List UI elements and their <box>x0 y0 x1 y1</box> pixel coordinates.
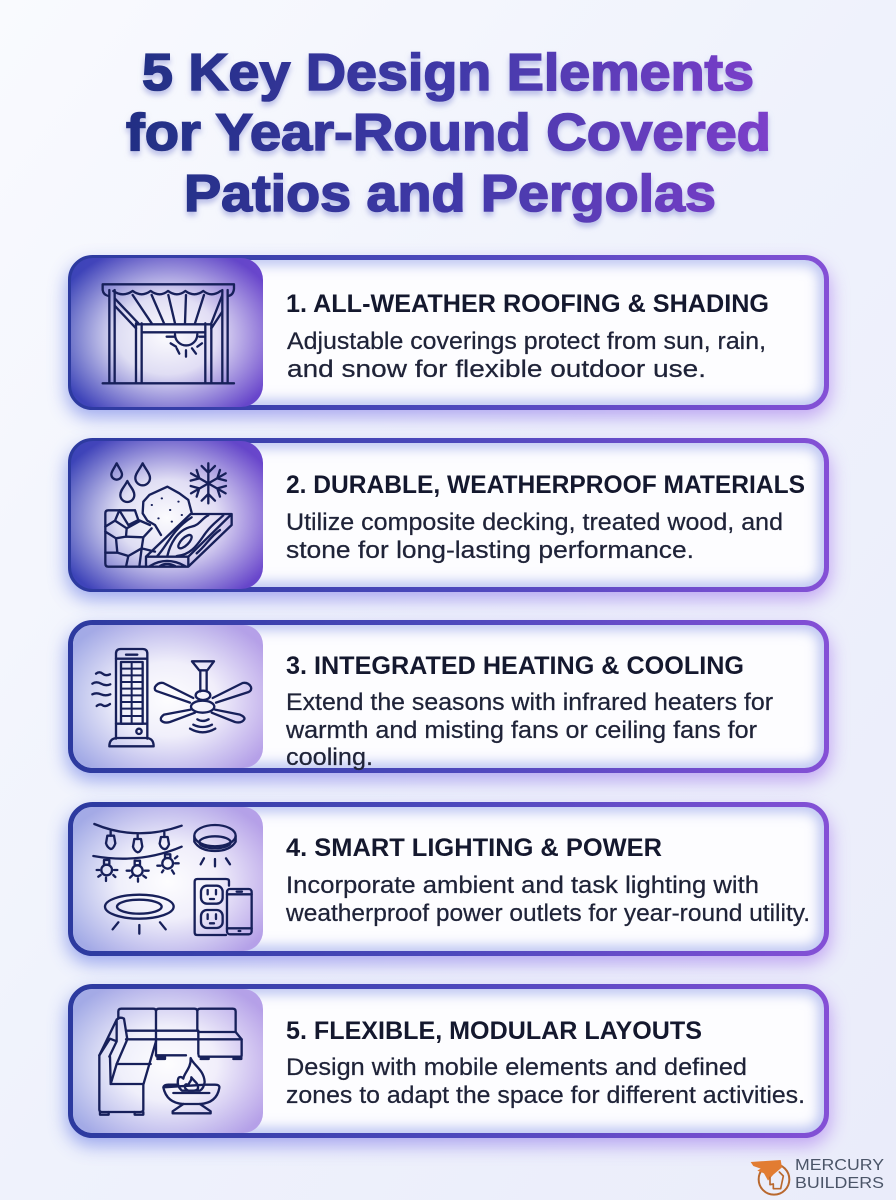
description <box>286 1054 805 1109</box>
description: weatherproof power outlets for year-round utility. <box>285 900 810 927</box>
description <box>286 509 783 564</box>
icon: tower heater and ceiling fan <box>92 649 251 746</box>
panel: card 2 durable materials <box>66 440 831 600</box>
wordmark: MERCURY <box>795 1157 884 1174</box>
panel: card 3 heating and cooling <box>66 622 831 781</box>
icon: weather and materials <box>105 463 232 567</box>
description <box>285 872 810 927</box>
description: Extend the seasons with infrared heaters for <box>286 689 773 716</box>
panel: card 5 modular layouts <box>66 986 831 1146</box>
heading: 5. FLEXIBLE, MODULAR LAYOUTS <box>286 1017 702 1045</box>
description <box>287 328 766 383</box>
title line 3: Patios and Pergolas <box>184 165 716 223</box>
description: Incorporate ambient and task lighting with <box>286 872 759 899</box>
heading: 2. DURABLE, WEATHERPROOF MATERIALS <box>286 471 805 499</box>
description: Adjustable coverings protect from sun, rain, <box>287 328 766 355</box>
wordmark: BUILDERS <box>795 1175 884 1192</box>
heading: 1. ALL-WEATHER ROOFING & SHADING <box>286 290 769 318</box>
description: stone for long-lasting performance. <box>286 537 694 564</box>
icon: sectional sofa and fire pit <box>99 1009 242 1115</box>
title <box>126 44 771 223</box>
title line 1: 5 Key Design Elements <box>142 44 754 102</box>
description: zones to adapt the space for different activities. <box>286 1082 805 1109</box>
heading: 4. SMART LIGHTING & POWER <box>286 834 662 862</box>
logo: Mercury Builders <box>751 1157 884 1195</box>
panel: card 4 smart lighting <box>66 804 831 964</box>
icon: pergola with sun <box>103 284 234 383</box>
description: cooling. <box>286 744 373 771</box>
description <box>285 689 773 771</box>
icon: winged head <box>751 1160 789 1195</box>
icon: string lights, fixtures, outlet and phone <box>93 824 252 935</box>
description: Design with mobile elements and defined <box>286 1054 747 1081</box>
description: and snow for flexible outdoor use. <box>287 356 706 383</box>
description: warmth and misting fans or ceiling fans for <box>285 717 757 744</box>
wordmark <box>795 1157 884 1192</box>
heading: 3. INTEGRATED HEATING & COOLING <box>286 652 744 680</box>
title line 2: for Year-Round Covered <box>126 104 771 162</box>
panel: card 1 all-weather roofing <box>66 258 831 418</box>
description: Utilize composite decking, treated wood, and <box>286 509 783 536</box>
